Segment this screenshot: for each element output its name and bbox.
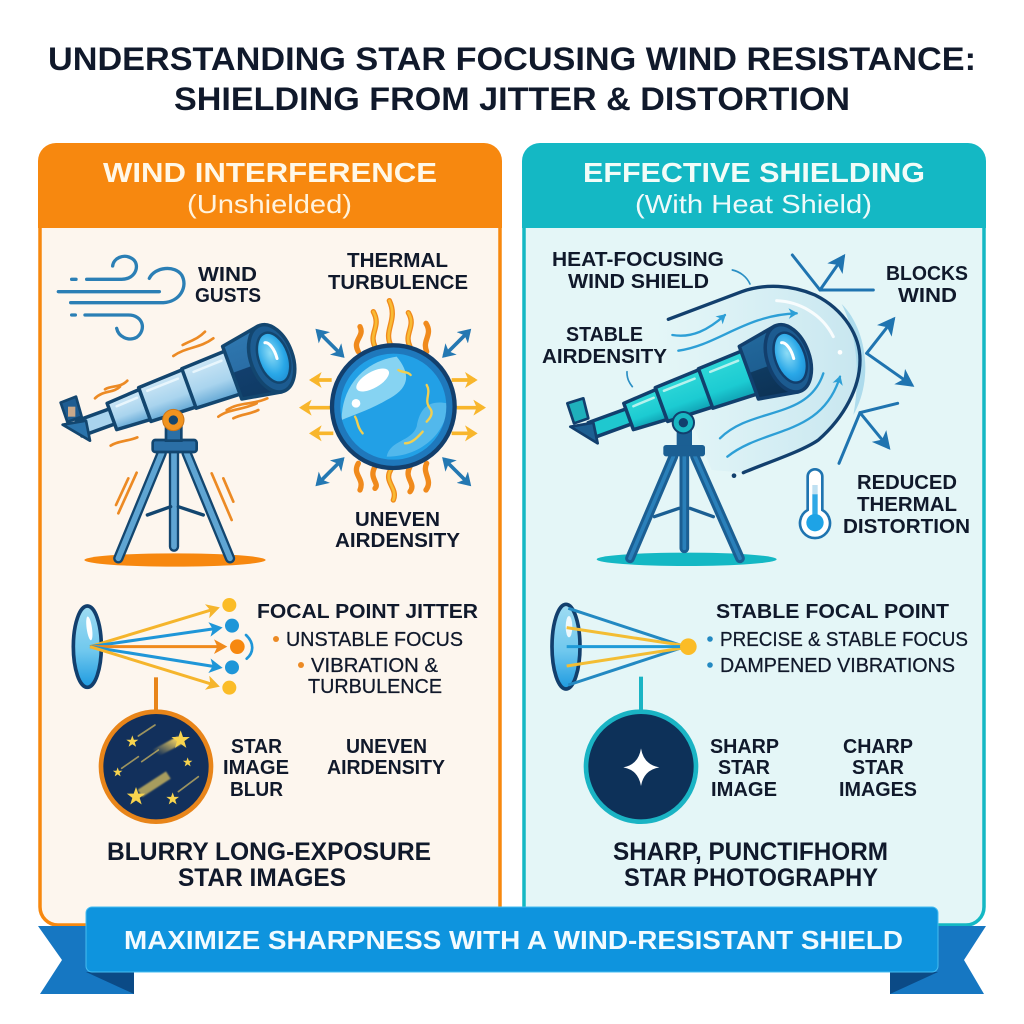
tripod <box>630 430 740 558</box>
telescope tube <box>67 318 303 461</box>
airflow lines <box>672 313 840 457</box>
text: focal point jitter: TURBULENCE <box>308 676 442 698</box>
tripod <box>118 427 230 558</box>
label: sharp star image: SHARP <box>710 735 779 758</box>
mount pivot <box>163 409 184 431</box>
text: stable focal point: PRECISE & STABLE FOCUS <box>720 629 968 651</box>
label: charp star images: STAR <box>852 756 904 779</box>
ground shadow <box>597 553 777 566</box>
ground shadow <box>84 553 266 567</box>
wind shield bubble <box>652 286 865 478</box>
leader lines <box>627 270 750 387</box>
panel body: unshielded <box>40 145 500 925</box>
conclusion: sharp photography: SHARP, PUNCTIFHORM <box>613 838 888 866</box>
header band: wind interference: WIND INTERFERENCE <box>103 157 437 188</box>
label: uneven air density lower: UNEVEN <box>346 735 427 758</box>
text: focal point jitter: VIBRATION & <box>311 655 439 677</box>
label: reduced thermal distortion: THERMAL <box>857 493 957 516</box>
label: star image blur: IMAGE <box>223 756 289 779</box>
eyepiece <box>567 398 598 443</box>
panel: effective shielding <box>522 143 986 925</box>
icon: turbulent air lens <box>302 301 483 500</box>
text: stable focal point: DAMPENED VIBRATIONS <box>720 655 955 677</box>
heat flames <box>356 301 428 500</box>
conclusion: blurry images: BLURRY LONG-EXPOSURE <box>107 838 431 866</box>
telescope: shaking on tripod <box>61 318 303 567</box>
focal dots <box>222 598 236 612</box>
label: reduced thermal distortion <box>843 471 970 538</box>
header band: effective shielding: (With Heat Shield) <box>635 189 872 219</box>
conclusion: sharp photography: STAR PHOTOGRAPHY <box>624 864 878 892</box>
deflected wind arrows <box>792 255 912 463</box>
label: blocks wind: BLOCKS <box>886 262 968 285</box>
label: star image blur <box>223 735 289 801</box>
header band: effective shielding <box>522 143 986 228</box>
label: sharp star image: IMAGE <box>711 778 777 801</box>
conclusion: blurry images <box>107 838 431 892</box>
focal dot <box>680 638 697 655</box>
label: charp star images <box>839 735 917 801</box>
label: star image blur: BLUR <box>230 778 283 801</box>
text: focal point jitter <box>257 600 478 698</box>
label: blocks wind <box>886 262 968 307</box>
text: stable focal point: STABLE FOCAL POINT <box>716 600 949 623</box>
sharp star image <box>586 712 696 822</box>
label: uneven air density lower <box>327 735 445 779</box>
title <box>48 41 976 117</box>
label: reduced thermal distortion: DISTORTION <box>843 515 970 538</box>
label: thermal turbulence: TURBULENCE <box>328 271 468 294</box>
conclusion: blurry images: STAR IMAGES <box>178 864 346 892</box>
header band: wind interference: (Unshielded) <box>187 189 352 219</box>
diagram: stable focal rays <box>552 604 697 822</box>
label: thermal turbulence <box>328 249 468 294</box>
label: thermal turbulence: THERMAL <box>347 249 448 272</box>
text: focal point jitter: FOCAL POINT JITTER <box>257 600 478 623</box>
connector <box>635 677 647 711</box>
label: sharp star image <box>710 735 779 801</box>
label: uneven air density <box>335 508 460 552</box>
label: uneven air density lower: AIRDENSITY <box>327 756 445 779</box>
conclusion: sharp photography <box>613 838 888 892</box>
banner ribbon <box>38 907 986 994</box>
panel: wind interference <box>38 143 502 925</box>
label: heat-focusing wind shield: HEAT-FOCUSING <box>552 248 724 271</box>
title: UNDERSTANDING STAR FOCUSING WIND RESISTANCE: <box>48 41 976 77</box>
telescope tube <box>579 318 820 463</box>
icon: thermometer <box>800 469 830 538</box>
rays <box>567 608 685 685</box>
text: focal point jitter: UNSTABLE FOCUS <box>286 629 463 651</box>
label: wind gusts: WIND <box>198 263 257 286</box>
mount pivot <box>673 412 694 433</box>
label: heat-focusing wind shield: WIND SHIELD <box>568 270 709 293</box>
blurred star image <box>101 712 211 822</box>
icon: wind gusts <box>58 256 184 339</box>
lens <box>552 604 580 689</box>
label: sharp star image: STAR <box>718 756 770 779</box>
label: charp star images: CHARP <box>843 735 913 758</box>
lens <box>73 606 101 687</box>
telescope with heat shield <box>567 255 912 566</box>
blue double arrows <box>317 331 469 484</box>
label: star image blur: STAR <box>231 735 282 758</box>
label: heat-focusing wind shield <box>552 248 724 293</box>
rays <box>90 608 224 686</box>
eyepiece <box>61 397 90 441</box>
label: uneven air density: UNEVEN <box>355 508 440 531</box>
label: wind gusts <box>195 263 261 307</box>
label: wind gusts: GUSTS <box>195 284 261 307</box>
label: reduced thermal distortion: REDUCED <box>857 471 957 494</box>
diagram: jittering focal rays <box>73 598 252 822</box>
connector <box>150 677 162 711</box>
title: SHIELDING FROM JITTER & DISTORTION <box>174 81 850 117</box>
label: stable air density <box>542 323 667 368</box>
header band: effective shielding: EFFECTIVE SHIELDING <box>583 157 925 188</box>
ribbon tails <box>38 926 986 994</box>
header band: wind interference <box>38 143 502 228</box>
ribbon band <box>86 907 938 972</box>
label: uneven air density: AIRDENSITY <box>335 529 460 552</box>
text: stable focal point <box>707 600 968 677</box>
ribbon text: MAXIMIZE SHARPNESS WITH A WIND-RESISTANT SHIELD <box>124 925 903 955</box>
panel body: shielded <box>524 145 984 925</box>
lens sphere <box>338 352 448 462</box>
label: charp star images: IMAGES <box>839 778 917 801</box>
yellow arrows <box>302 380 483 433</box>
label: stable air density: STABLE <box>566 323 643 346</box>
label: blocks wind: WIND <box>898 284 957 307</box>
motion lines <box>95 332 267 520</box>
label: stable air density: AIRDENSITY <box>542 345 667 368</box>
